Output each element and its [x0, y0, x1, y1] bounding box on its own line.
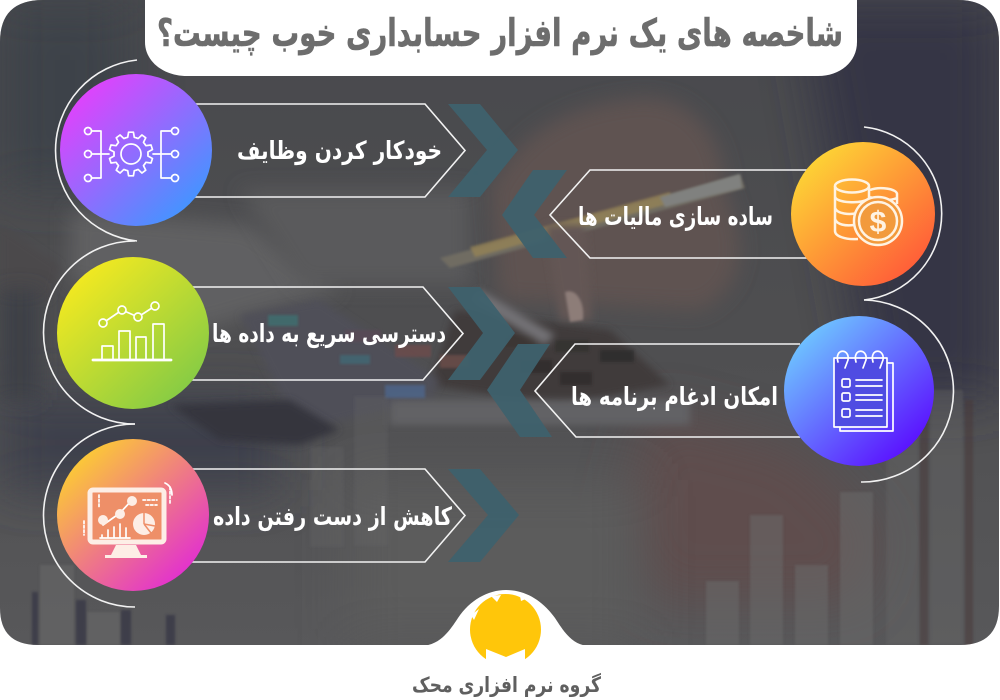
- label: دسترسی سریع به داده ها: [212, 319, 446, 349]
- item: simplify taxes: [550, 127, 942, 300]
- title tab: [145, 0, 857, 76]
- icon: bar and line chart: [93, 302, 171, 360]
- item: automate tasks: [56, 60, 465, 241]
- item: reduce data loss: [43, 424, 465, 607]
- icon: notebook checklist: [834, 351, 893, 431]
- label: امکان ادغام برنامه ها: [571, 382, 778, 412]
- item: fast data access: [43, 241, 463, 424]
- logo: white bump and yellow mark: [412, 590, 602, 697]
- icon: gear with nodes: [84, 128, 178, 182]
- item: app integration: [535, 300, 953, 482]
- label: کاهش از دست رفتن داده: [213, 502, 452, 532]
- icon: coins and dollar: [835, 180, 902, 245]
- icon: monitor dashboard: [84, 483, 172, 558]
- dollar sign: $: [870, 206, 887, 239]
- label: ساده سازی مالیات ها: [578, 202, 773, 231]
- label: خودکار کردن وظایف: [237, 136, 442, 166]
- company name: گروه نرم افزاری محک: [412, 672, 602, 697]
- chevrons: teal arrows: [448, 104, 567, 562]
